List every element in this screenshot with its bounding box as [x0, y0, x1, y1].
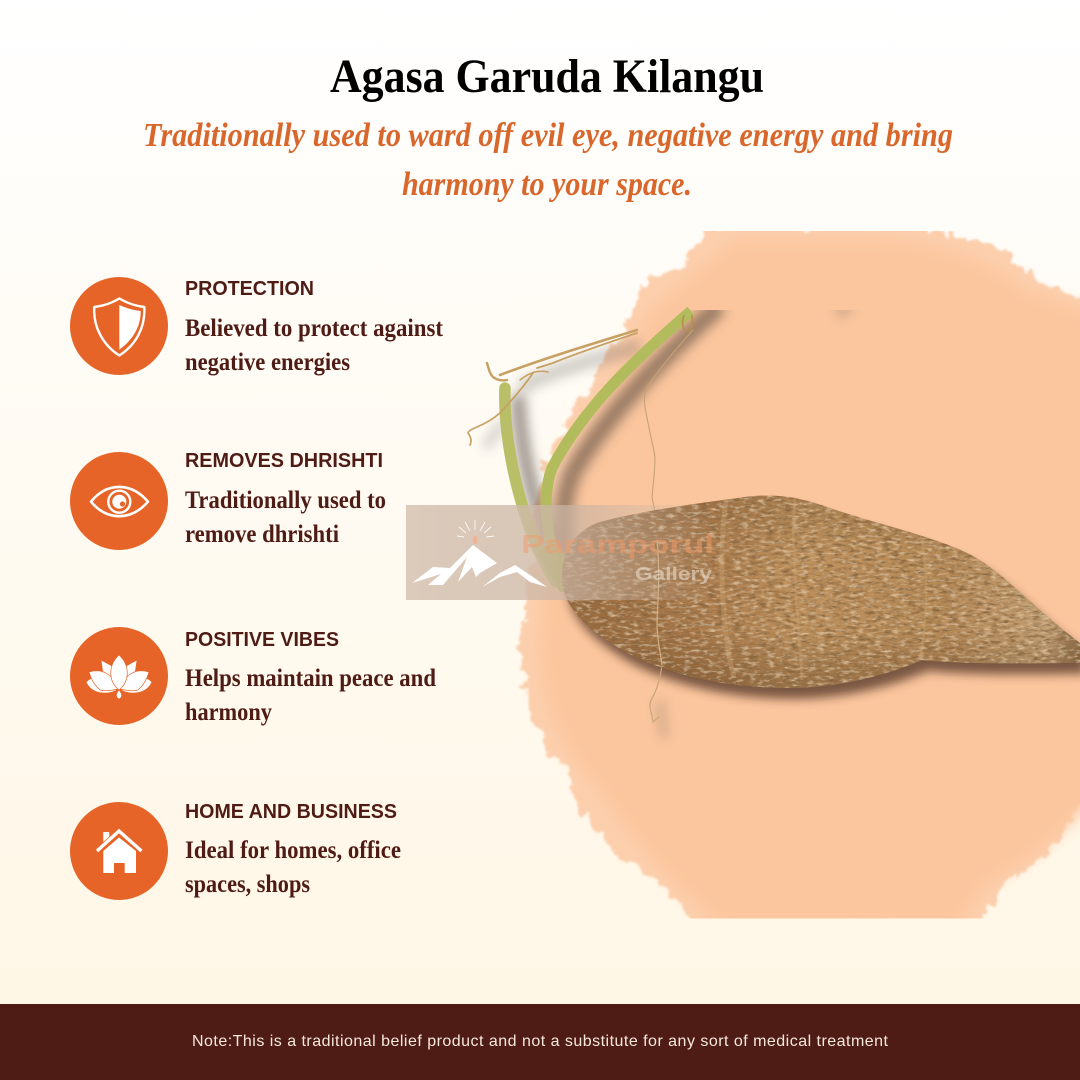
right stem [546, 311, 691, 565]
subtitle [143, 117, 953, 203]
description: spaces, shops [185, 871, 310, 898]
heading: POSITIVE VIBES [185, 629, 339, 651]
description [185, 665, 436, 726]
description: Traditionally used to [185, 487, 386, 514]
subtitle: harmony to your space. [402, 166, 692, 203]
stem base [538, 540, 568, 592]
watermark mountain logo [412, 520, 547, 587]
footer note: Note:This is a traditional belief product and not a substitute for any sort of medical treatment [192, 1033, 889, 1050]
description: Helps maintain peace and [185, 665, 436, 692]
feature: removes dhrishti [70, 450, 386, 550]
icon: eye [70, 452, 168, 550]
heading: PROTECTION [185, 278, 314, 300]
watermark [406, 505, 716, 600]
stem shadows [486, 305, 848, 738]
left stem [505, 388, 556, 582]
watermark: Gallery [635, 564, 712, 584]
root shadow [568, 506, 1080, 699]
root hair over tuber [657, 540, 662, 665]
description: Believed to protect against [185, 315, 444, 342]
peach paint blob [522, 225, 1080, 925]
feature: home and business [70, 801, 401, 900]
product photo: root with stems [468, 305, 1080, 738]
icon: house [70, 802, 168, 900]
feature: positive vibes [70, 627, 436, 726]
icon: lotus [70, 627, 168, 725]
description: negative energies [185, 349, 350, 376]
tuber rings [722, 497, 926, 680]
title: Agasa Garuda Kilangu [330, 50, 764, 103]
footer band [0, 1004, 1080, 1080]
description: remove dhrishti [185, 521, 339, 548]
description [185, 315, 444, 376]
description [185, 837, 401, 898]
dry fibres [468, 316, 693, 722]
tuber [562, 495, 1080, 688]
heading: HOME AND BUSINESS [185, 801, 397, 823]
subtitle: Traditionally used to ward off evil eye, negative energy and bring [143, 117, 953, 154]
description: harmony [185, 699, 272, 726]
description: Ideal for homes, office [185, 837, 401, 864]
heading: REMOVES DHRISHTI [185, 450, 383, 472]
watermark name: Paramporul [521, 529, 714, 559]
icon: shield [70, 277, 168, 375]
description [185, 487, 386, 548]
feature: protection [70, 277, 444, 376]
